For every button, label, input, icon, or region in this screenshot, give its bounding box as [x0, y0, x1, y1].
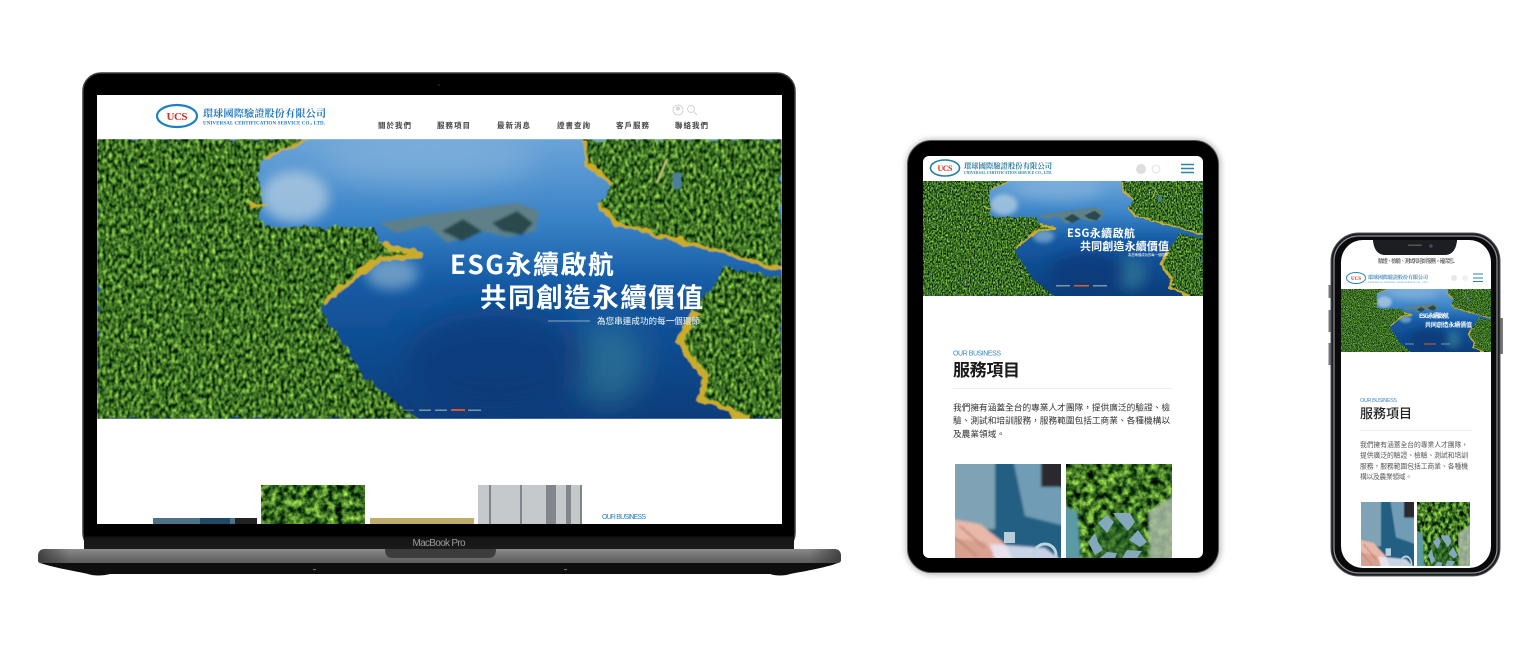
- phone image: recycling forest: [1417, 502, 1470, 566]
- navigation: 最新消息: [497, 120, 530, 131]
- logo: UCS: [166, 111, 188, 123]
- tablet shadow: [906, 139, 1221, 575]
- tablet header: 環球國際驗證股份有限公司: [964, 162, 1052, 170]
- icons: user and search: [673, 105, 697, 115]
- tablet image: hand: [955, 464, 1061, 558]
- hero image: [97, 131, 782, 419]
- phone screen: [1341, 240, 1491, 571]
- hero text: 為您串連成功的每一個環節: [597, 315, 700, 327]
- phone header: UNIVERSAL CERTIFICATION SERVICE CO., LTD.: [1368, 281, 1428, 284]
- slider indicator: [403, 409, 481, 411]
- laptop base: [38, 549, 841, 563]
- our business label: OUR BUSINESS: [602, 514, 646, 521]
- device: phone: [1328, 233, 1503, 576]
- tablet header: UCS: [938, 164, 953, 173]
- phone side buttons: [1328, 285, 1503, 365]
- hero text: [452, 252, 702, 325]
- laptop notch: [385, 549, 496, 558]
- phone body: [1331, 233, 1500, 576]
- phone top text: 驗證、檢驗、測試和培訓服務，確保您...: [1378, 257, 1455, 265]
- MacBook label: MacBook Pro: [412, 538, 466, 549]
- tablet our business label: OUR BUSINESS: [953, 350, 1001, 358]
- phone hero text: ESG永續啟航: [1419, 311, 1449, 320]
- logo: UNIVERSAL CERTIFICATION SERVICE CO., LTD.: [203, 122, 326, 126]
- logo: [157, 105, 326, 127]
- navigation: 聯絡我們: [675, 120, 708, 131]
- tablet hero text: ESG永續啟航: [1067, 225, 1135, 241]
- phone image: hand: [1361, 502, 1414, 566]
- phone paragraph: 提供廣泛的驗證、檢驗、測試和培訓: [1360, 450, 1468, 460]
- phone paragraph: 構以及農業領域。: [1360, 471, 1412, 481]
- tablet slider: [1056, 285, 1107, 286]
- phone heading: 服務項目: [1360, 403, 1412, 422]
- tablet paragraph: 及農業領域。: [953, 427, 1005, 440]
- site header: [157, 105, 708, 131]
- service thumbnails: [153, 485, 582, 524]
- phone paragraph: 我們擁有涵蓋全台的專業人才團隊，: [1360, 439, 1468, 449]
- navigation: 客戶服務: [616, 120, 650, 131]
- device: MacBook Pro laptop: [38, 73, 841, 576]
- phone our business label: OUR BUSINESS: [1360, 398, 1397, 404]
- laptop screen: [97, 95, 782, 524]
- phone header: [1346, 272, 1483, 284]
- tablet paragraph: [953, 403, 1170, 438]
- tablet hero text: [1067, 225, 1169, 257]
- phone paragraph: 服務，服務範圍包括工商業、各種機: [1360, 460, 1468, 470]
- camera: [438, 84, 440, 86]
- device: tablet: [906, 139, 1221, 575]
- logo: 環球國際驗證股份有限公司: [203, 107, 326, 120]
- tablet body: [908, 140, 1218, 572]
- tablet header: [930, 160, 1194, 176]
- tablet hero text: 共同創造永續價值: [1080, 238, 1169, 254]
- phone hero image: [1341, 287, 1491, 352]
- phone hero text: 共同創造永續價值: [1425, 320, 1472, 329]
- navigation: 關於我們: [378, 120, 412, 131]
- phone header: 環球國際驗證股份有限公司: [1368, 274, 1428, 281]
- tablet paragraph: 驗、測試和培訓服務，服務範圍包括工商業、各種機構以: [953, 414, 1170, 426]
- laptop underside: [40, 563, 838, 576]
- tablet screen: [923, 156, 1203, 566]
- phone header: UCS: [1351, 277, 1361, 282]
- tablet paragraph: 我們擁有涵蓋全台的專業人才團隊，提供廣泛的驗證、檢: [953, 400, 1170, 414]
- phone paragraph: [1360, 439, 1468, 481]
- phone notch: [1373, 240, 1457, 255]
- laptop lid: [83, 73, 795, 551]
- navigation: 證書查詢: [557, 120, 590, 131]
- hero text: 共同創造永續價值: [480, 276, 703, 315]
- tablet hero image: [923, 178, 1203, 296]
- tablet header: UNIVERSAL CERTIFICATION SERVICE CO., LTD.: [964, 171, 1052, 175]
- phone slider: [1405, 344, 1450, 345]
- tablet image: recycling forest: [1066, 464, 1172, 558]
- hero text: ESG永續啟航: [450, 245, 614, 282]
- navigation: [378, 121, 708, 130]
- tablet heading: 服務項目: [953, 356, 1020, 381]
- tablet hero text: 為您串連成功的每一個環節: [1128, 252, 1169, 257]
- phone hero text: [1420, 312, 1472, 328]
- laptop chin: [84, 524, 794, 549]
- navigation: 服務項目: [437, 120, 470, 131]
